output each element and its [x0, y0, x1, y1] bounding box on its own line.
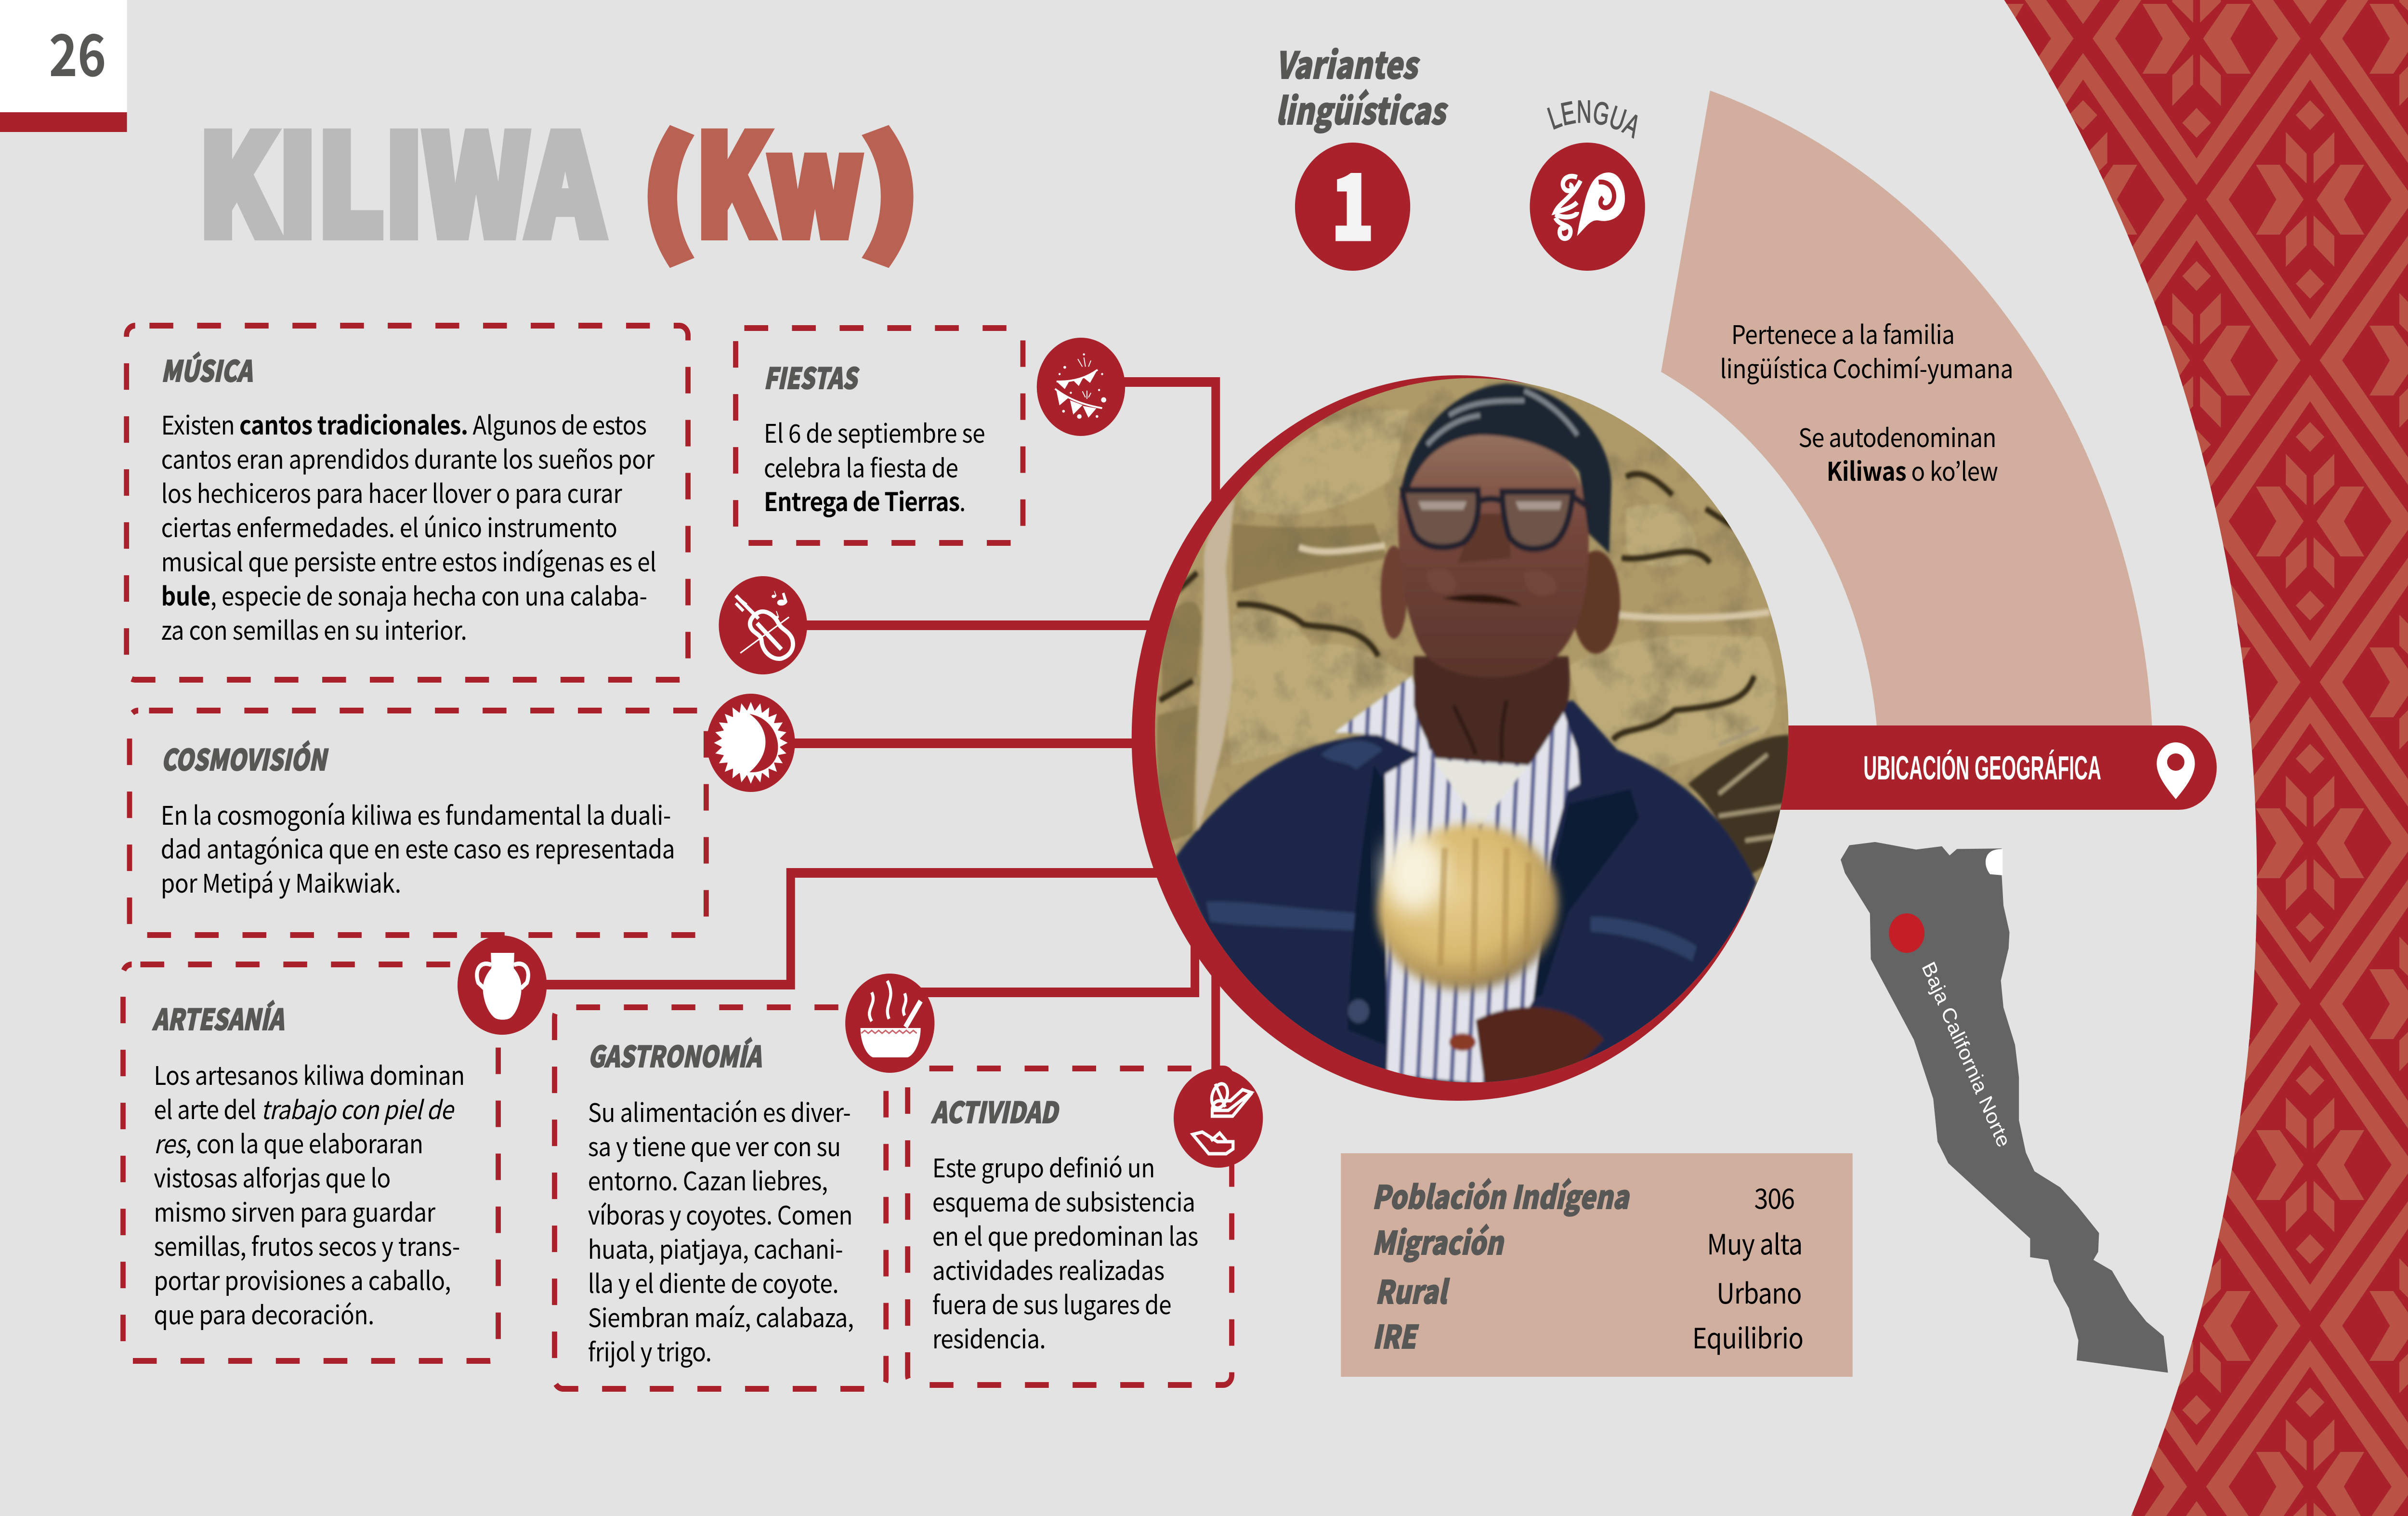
title: )	[863, 93, 918, 271]
body text: gastronomía: víboras y coyotes. Comen	[588, 1195, 852, 1232]
stats panel: Rural	[1375, 1267, 1450, 1313]
body text: música: za con semillas en su interior.	[161, 610, 467, 647]
stats panel: Equilibrio	[1692, 1316, 1804, 1357]
body text: artesanía: el arte del trabajo con piel de	[154, 1090, 455, 1127]
page number tab	[0, 0, 127, 132]
body text: gastronomía: huata, piatjaya, cachani-	[588, 1229, 843, 1266]
body text: artesanía: portar provisiones a caballo,	[154, 1261, 451, 1298]
heading: variantes lingüísticas: Variantes	[1275, 36, 1420, 89]
body text: cosmovisión	[161, 795, 675, 900]
heading: variantes lingüísticas	[1275, 36, 1448, 135]
body text: actividad: esquema de subsistencia	[932, 1182, 1195, 1219]
badge: number of variants	[1295, 135, 1410, 271]
body text: artesanía: mismo sirven para guardar	[154, 1192, 436, 1229]
stats panel: IRE	[1373, 1312, 1419, 1358]
heading: actividad: ACTIVIDAD	[931, 1090, 1060, 1132]
heading: variantes lingüísticas: lingüísticas	[1275, 82, 1448, 135]
body text: gastronomía	[588, 1093, 854, 1369]
heading: fiestas: FIESTAS	[764, 356, 860, 397]
body text: artesanía: res, con la que elaboraran	[154, 1124, 423, 1161]
body text: fiestas: Entrega de Tierras.	[764, 482, 966, 519]
stats panel	[1341, 1153, 1853, 1377]
heading: cosmovisión: COSMOVISIÓN	[161, 738, 329, 779]
body text: música: Existen cantos tradicionales. Algunos de estos	[161, 405, 647, 442]
decorative textile band	[2004, 0, 2408, 1516]
panel: artesanía	[123, 964, 498, 1361]
stats panel: Migración	[1372, 1218, 1505, 1264]
heading: música: MÚSICA	[161, 349, 253, 390]
body text: actividad: en el que predominan las	[932, 1216, 1198, 1253]
panel: language family arc	[1661, 91, 2152, 732]
panel: language family arc: Pertenece a la familia	[1731, 315, 1955, 352]
heading: gastronomía: GASTRONOMÍA	[588, 1034, 762, 1076]
location bar: UBICACIÓN GEOGRÁFICA	[1863, 749, 2101, 787]
photo: man with rattle	[1155, 378, 1789, 1082]
title: KILIWA	[198, 77, 604, 276]
map: Baja California Norte	[1841, 842, 2168, 1373]
body text: fiestas: El 6 de septiembre se	[764, 413, 985, 450]
badge: number of variants: 1	[1331, 135, 1374, 266]
icon: música violin	[719, 576, 807, 674]
connector lines	[502, 382, 1216, 1118]
panel: actividad	[908, 1068, 1232, 1385]
body text: actividad	[932, 1148, 1198, 1356]
panel: language family arc: Se autodenominan	[1798, 418, 1996, 455]
panel: language family arc: Kiliwas o ko’lew	[1827, 451, 1998, 488]
label: lengua: LENGUA	[1547, 100, 1637, 139]
body text: música: musical que persiste entre estos indígenas es el	[161, 542, 656, 579]
heading: artesanía: ARTESANÍA	[152, 997, 284, 1039]
icon: cosmovisión sun and moon	[699, 685, 803, 801]
stats panel: Muy alta	[1707, 1222, 1803, 1263]
body text: gastronomía: Su alimentación es diver-	[588, 1093, 851, 1130]
body text: artesanía: Los artesanos kiliwa dominan	[154, 1055, 465, 1093]
body text: artesanía: semillas, frutos secos y trans-	[154, 1226, 460, 1264]
icon: artesanía jug	[458, 936, 547, 1035]
panel: fiestas	[736, 328, 1023, 543]
body text: gastronomía: lla y el diente de coyote.	[588, 1264, 839, 1301]
body text: música: bule, especie de sonaja hecha con una calaba-	[161, 576, 647, 613]
page number tab: 26	[49, 9, 106, 93]
body text: gastronomía: frijol y trigo.	[588, 1332, 712, 1369]
title	[198, 77, 918, 276]
body text: música	[161, 405, 656, 647]
body text: gastronomía: Siembran maíz, calabaza,	[588, 1298, 854, 1335]
body text: artesanía: que para decoración.	[154, 1295, 374, 1332]
body text: cosmovisión: En la cosmogonía kiliwa es fundamental la duali-	[161, 795, 671, 832]
panel: language family arc: lingüística Cochimí-yumana	[1720, 349, 2013, 386]
body text: actividad: actividades realizadas	[932, 1251, 1165, 1288]
title: Kw	[696, 77, 863, 276]
stats panel: 306	[1754, 1176, 1795, 1217]
photo ring	[1132, 375, 1784, 1101]
panel: cosmovisión	[130, 711, 706, 935]
panel: música	[127, 326, 688, 680]
icon: actividad hands	[1174, 1068, 1263, 1168]
body text: artesanía: vistosas alforjas que lo	[154, 1158, 391, 1195]
body text: actividad: fuera de sus lugares de	[932, 1285, 1172, 1322]
panel: gastronomía	[554, 1007, 886, 1389]
body text: música: cantos eran aprendidos durante los sueños por	[161, 439, 655, 476]
title: (	[643, 93, 693, 271]
icon: fiestas bunting	[1037, 338, 1125, 436]
stats panel: Población Indígena	[1372, 1172, 1630, 1218]
body text: cosmovisión: por Metipá y Maikwiak.	[161, 863, 401, 900]
body text: cosmovisión: dad antagónica que en este caso es representada	[161, 829, 675, 866]
body text: fiestas: celebra la fiesta de	[764, 448, 958, 485]
body text: gastronomía: sa y tiene que ver con su	[588, 1127, 841, 1164]
icon: gastronomía steaming bowl	[845, 974, 934, 1073]
body text: actividad: Este grupo definió un	[932, 1148, 1155, 1185]
map: Baja California Norte: Baja California Norte	[1917, 958, 2015, 1151]
body text: gastronomía: entorno. Cazan liebres,	[588, 1161, 828, 1198]
stats panel: Urbano	[1716, 1271, 1802, 1312]
body text: actividad: residencia.	[932, 1319, 1046, 1356]
badge: lengua icon	[1530, 143, 1645, 271]
location bar	[1689, 725, 2217, 810]
body text: música: ciertas enfermedades. el único instrumento	[161, 508, 617, 545]
body text: música: los hechiceros para hacer llover o para curar	[161, 474, 622, 511]
body text: fiestas	[764, 413, 985, 519]
body text: artesanía	[154, 1055, 465, 1332]
